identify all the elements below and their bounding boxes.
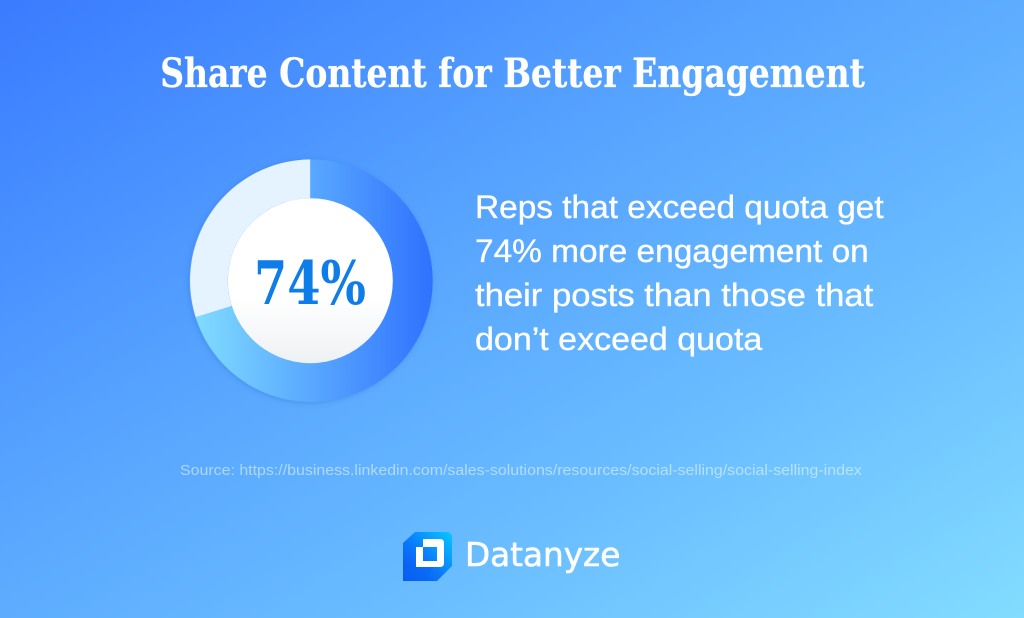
text block: description: 74% more engagement on xyxy=(475,233,869,269)
light remainder segment xyxy=(190,159,310,317)
ring shadow xyxy=(189,160,431,402)
donut chart: 74% xyxy=(188,159,433,404)
74% gradient arc xyxy=(196,159,433,402)
title: Share Content for Better Engagement xyxy=(160,50,865,97)
text block: description: don’t exceed quota xyxy=(475,321,762,357)
text block: description: their posts than those that xyxy=(475,277,873,313)
wordmark: Datanyze xyxy=(465,535,620,574)
icon: logo mark xyxy=(403,532,452,581)
text block: description: Reps that exceed quota get xyxy=(475,189,884,225)
source note: Source: https://business.linkedin.com/sales-solutions/resources/social-selling/social-selling-index xyxy=(180,462,862,479)
text block: description xyxy=(475,189,884,357)
centre disc xyxy=(228,198,393,363)
logo: Datanyze xyxy=(403,532,620,581)
percentage label: 74% xyxy=(254,249,366,319)
